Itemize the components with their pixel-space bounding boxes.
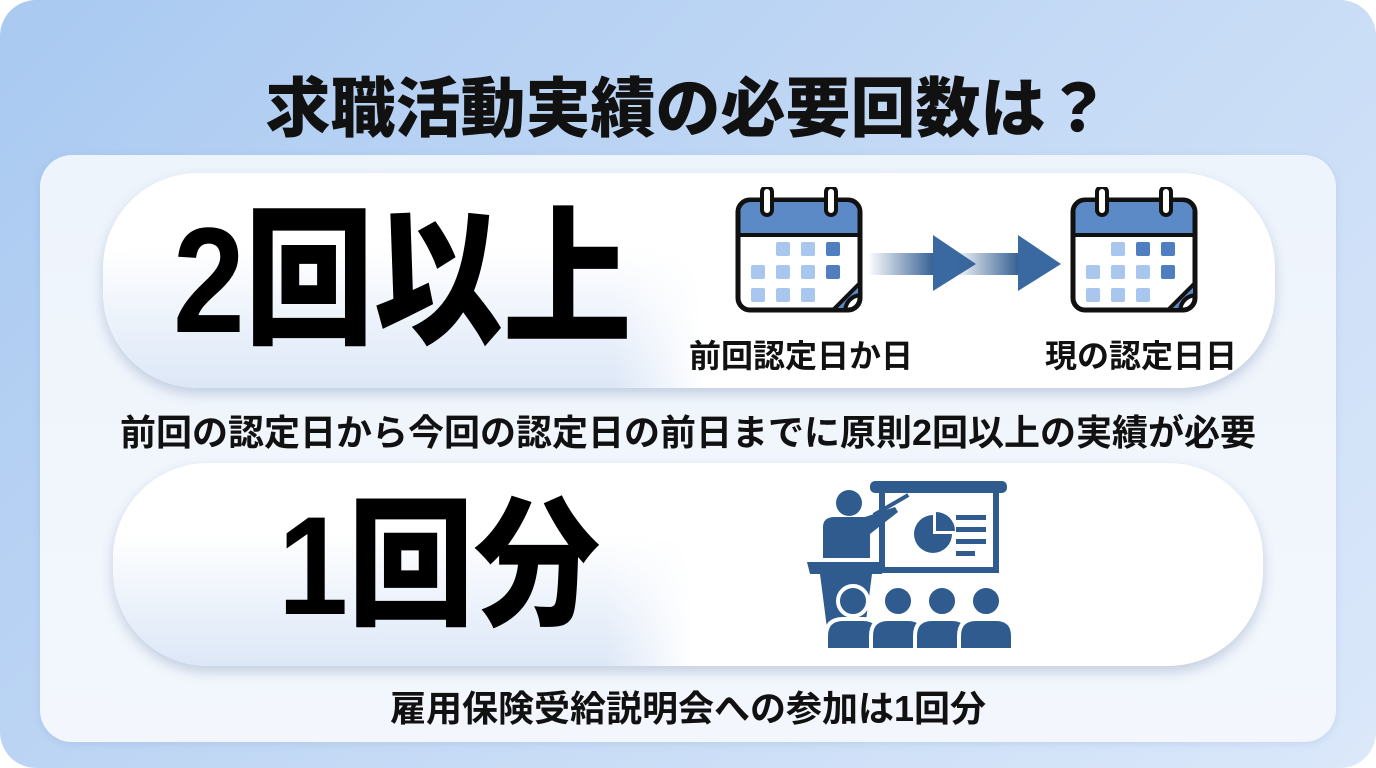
label: 現の認定日日: 現の認定日日 [1045,338,1237,374]
arrows [870,235,1061,291]
icon: calendar right [1070,187,1198,312]
caption 2: 雇用保険受給説明会への参加は1回分 [390,688,986,729]
icon: presenter with audience [807,481,1011,648]
caption 1: 前回の認定日から今回の認定日の前日までに原則2回以上の実績が必要 [120,412,1256,453]
big text: 1回分: 1回分 [278,487,600,644]
panel: main [40,155,1336,742]
title: 求職活動実績の必要回数は？ [265,72,1110,145]
pill: 2回以上 [103,173,1275,388]
label: 前回認定日か日: 前回認定日か日 [689,338,913,374]
big text: 2回以上: 2回以上 [173,196,632,364]
pill: 1回分 [113,463,1263,666]
icon: calendar left [736,187,862,312]
